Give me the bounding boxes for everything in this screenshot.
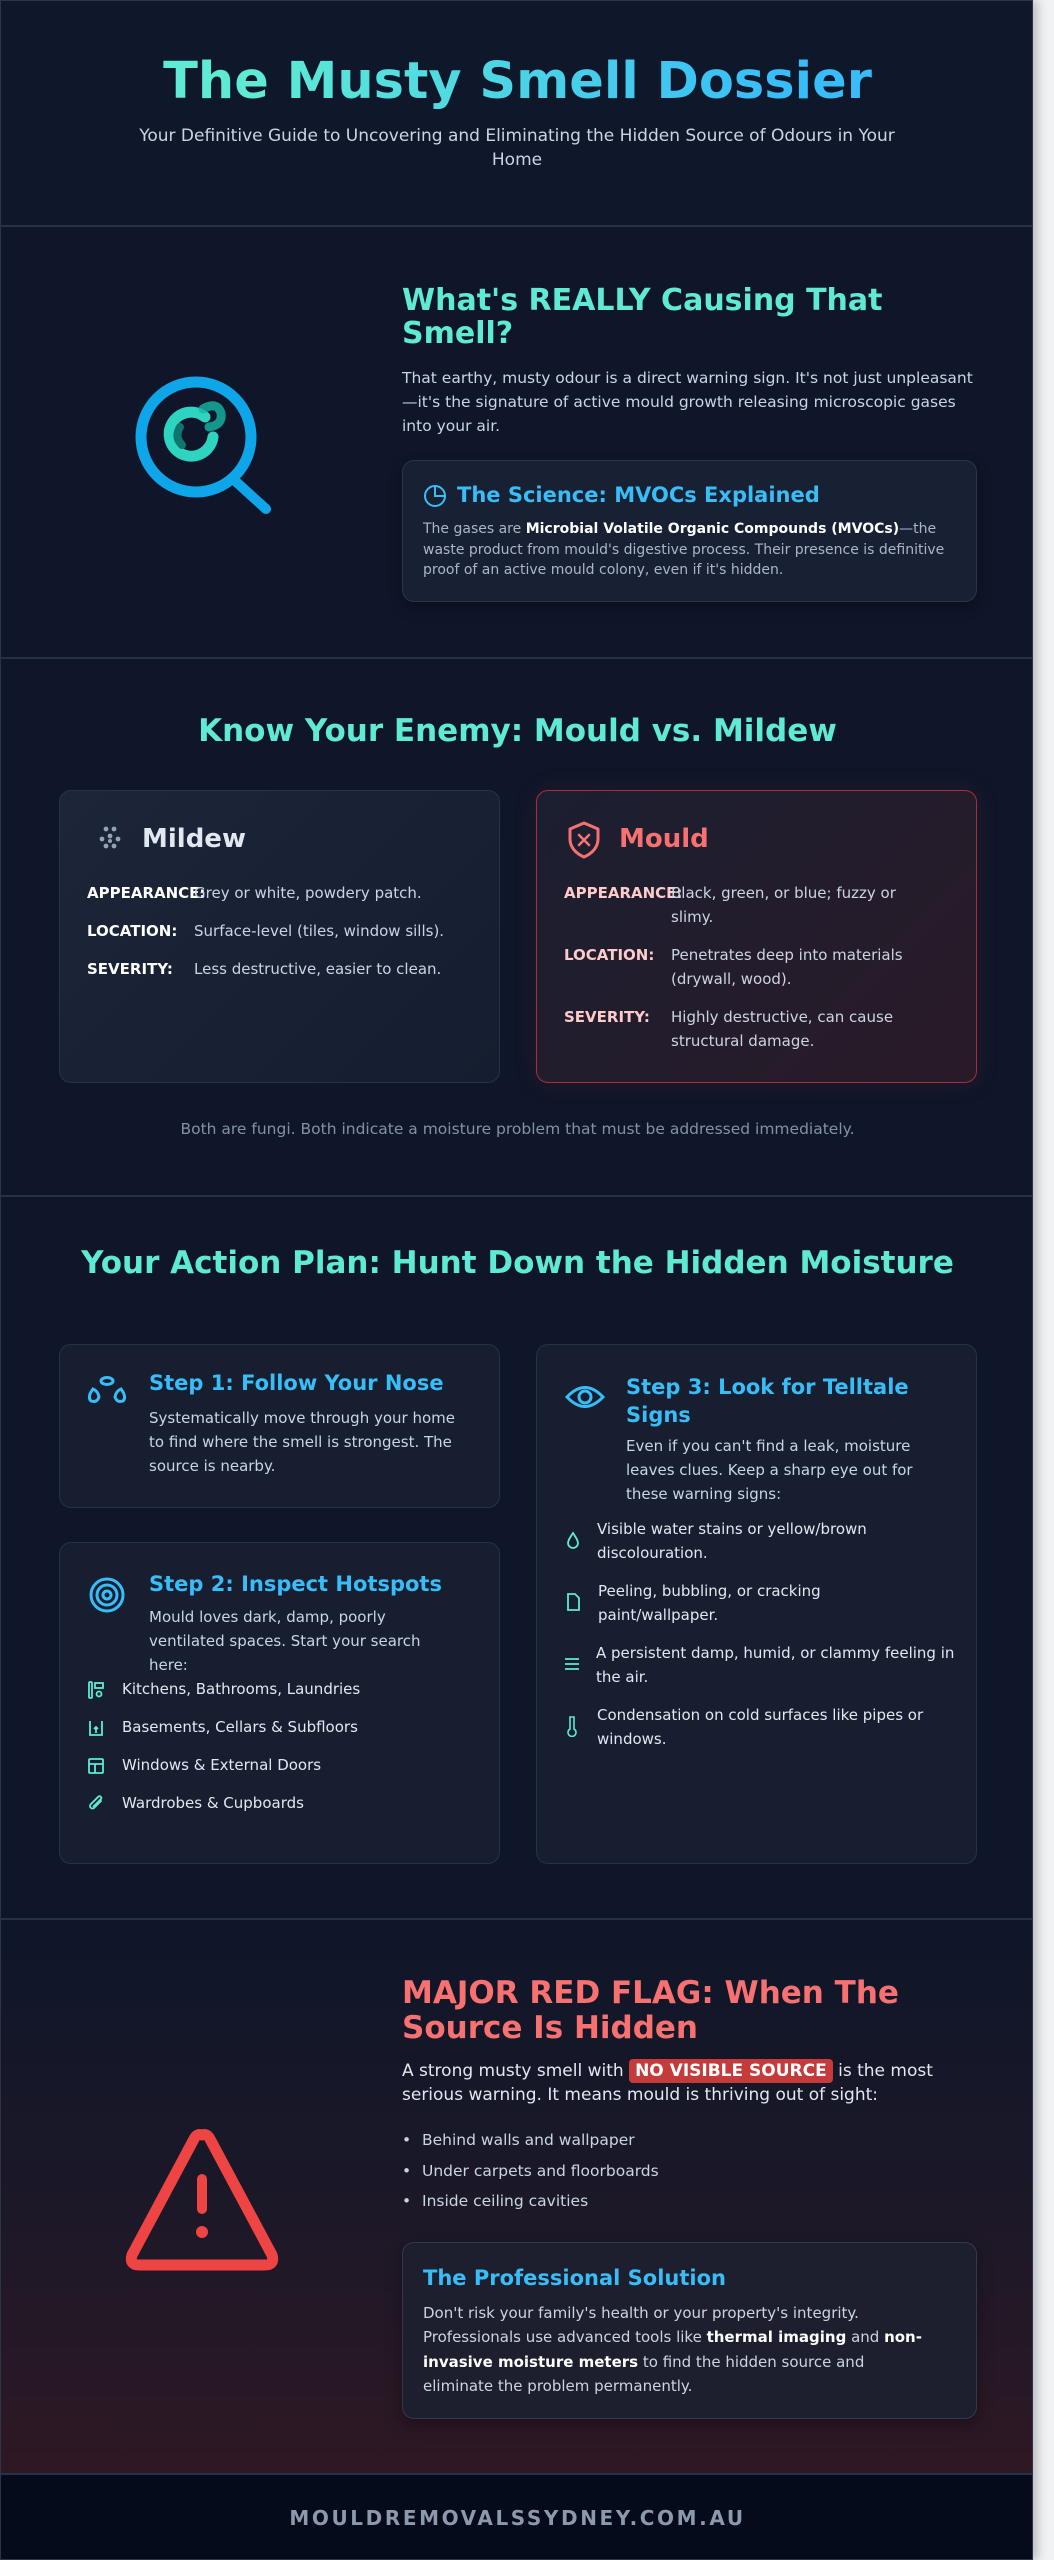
mildew rows: APPEARANCE: (87, 884, 205, 902)
callout text: The gases are Microbial Volatile Organic Compounds (MVOCs)—the waste product from mould's digestive process. Their presence is definitive proof of an active mould colony, even if it's hidden. (423, 521, 944, 578)
list: hidden locations: • (402, 2192, 411, 2210)
signs list: Visible water stains or yellow/brown discolouration. (597, 1520, 867, 1562)
section: causes (1, 227, 1034, 659)
step 2 text: Mould loves dark, damp, poorly ventilated spaces. Start your search here: (149, 1608, 421, 1674)
icon: warning triangle (126, 2129, 278, 2270)
icon: shield x (568, 822, 600, 858)
step 1 title: Step 1: Follow Your Nose (149, 1371, 444, 1395)
icon: mildew dots (100, 826, 120, 848)
mould rows: Black, green, or blue; fuzzy or slimy. (671, 884, 896, 926)
list: hidden locations: • (402, 2162, 411, 2180)
mould rows (564, 884, 903, 1050)
mould title: Mould (619, 824, 709, 854)
title (1, 52, 1034, 112)
signs list: A persistent damp, humid, or clammy feeling in the air. (596, 1644, 954, 1686)
mildew rows: Grey or white, powdery patch. (194, 884, 422, 902)
panel: mould (536, 790, 977, 1083)
note: Both are fungi. Both indicate a moisture problem that must be addressed immediately. (180, 1120, 855, 1138)
signs list: paint/wallpaper. (598, 1606, 718, 1624)
mildew rows: SEVERITY: (87, 960, 173, 978)
subtitle: Your Definitive Guide to Uncovering and Eliminating the Hidden Source of Odours in Your Home (139, 126, 895, 170)
icon: pie (424, 485, 446, 507)
hotspot list (88, 1680, 360, 1812)
mould rows: APPEARANCE: (564, 884, 682, 902)
panel: step 1 (59, 1344, 500, 1508)
icon: target (90, 1578, 124, 1612)
list: hidden locations: Behind walls and wallpaper (422, 2131, 635, 2149)
hotspot list: Wardrobes & Cupboards (122, 1794, 304, 1812)
step 1 text: Systematically move through your home to find where the smell is strongest. The source is nearby. (149, 1409, 455, 1475)
mould rows: Penetrates deep into materials (drywall, wood). (671, 946, 903, 988)
panel: step 3 (536, 1344, 977, 1864)
signs list (565, 1520, 954, 1748)
callout: science (402, 460, 977, 602)
step 2 title: Step 2: Inspect Hotspots (149, 1572, 442, 1596)
mildew rows: LOCATION: (87, 922, 177, 940)
step 3 text: Even if you can't find a leak, moisture leaves clues. Keep a sharp eye out for these warning signs: (626, 1437, 913, 1503)
icon: magnifier with mould (136, 376, 271, 514)
step 3 title: Step 3: Look for Telltale Signs (626, 1375, 909, 1427)
mould rows: Highly destructive, can cause structural damage. (671, 1008, 893, 1050)
footer url: MOULDREMOVALSSYDNEY.COM.AU (289, 2506, 746, 2530)
section: red flag (1, 1920, 1034, 2475)
mildew rows: Surface-level (tiles, window sills). (194, 922, 444, 940)
list: hidden locations (402, 2131, 659, 2210)
signs list: Peeling, bubbling, or cracking (598, 1582, 821, 1600)
signs list: Condensation on cold surfaces like pipes or windows. (597, 1706, 923, 1748)
heading: action plan: Your Action Plan: Hunt Down the Hidden Moisture (81, 1245, 954, 1281)
footer (1, 2475, 1034, 2560)
callout: professional solution (402, 2242, 977, 2419)
text: causes intro: That earthy, musty odour is a direct warning sign. It's not just unpleasant—it's the signature of active mould growth releasing microscopic gases into your air. (402, 369, 973, 435)
list: hidden locations: • (402, 2131, 411, 2149)
mildew title: Mildew (142, 824, 246, 854)
callout title: The Science: MVOCs Explained (457, 483, 820, 507)
text: warning: A strong musty smell with NO VISIBLE SOURCE is the most serious warning. It means mould is thriving out of sight: (402, 2061, 933, 2105)
icon: nose (88, 1376, 126, 1403)
hotspot list: Kitchens, Bathrooms, Laundries (122, 1680, 360, 1698)
panel: mildew (59, 790, 500, 1083)
list: hidden locations: Inside ceiling cavities (422, 2192, 588, 2210)
list: hidden locations: Under carpets and floorboards (422, 2162, 659, 2180)
mould rows: SEVERITY: (564, 1008, 650, 1026)
mildew rows (87, 884, 444, 978)
icon: eye (565, 1386, 605, 1408)
heading: causes: What's REALLY Causing That Smell? (402, 283, 882, 351)
callout title: The Professional Solution (423, 2266, 726, 2290)
callout text: Don't risk your family's health or your property's integrity. Professionals use advanced tools like thermal imaging and non-invasive moisture meters to find the hidden source and eliminate the problem permanently. (423, 2304, 922, 2395)
section: action plan (1, 1197, 1034, 1920)
mildew rows: Less destructive, easier to clean. (194, 960, 441, 978)
header (1, 1, 1034, 227)
heading: enemy: Know Your Enemy: Mould vs. Mildew (198, 713, 837, 749)
hotspot list: Basements, Cellars & Subfloors (122, 1718, 358, 1736)
mould rows: LOCATION: (564, 946, 654, 964)
panel: step 2 (59, 1542, 500, 1864)
section: mould vs mildew (1, 659, 1034, 1197)
title: The Musty Smell Dossier (163, 52, 872, 111)
heading: red flag: MAJOR RED FLAG: When The Source Is Hidden (402, 1975, 899, 2046)
hotspot list: Windows & External Doors (122, 1756, 321, 1774)
